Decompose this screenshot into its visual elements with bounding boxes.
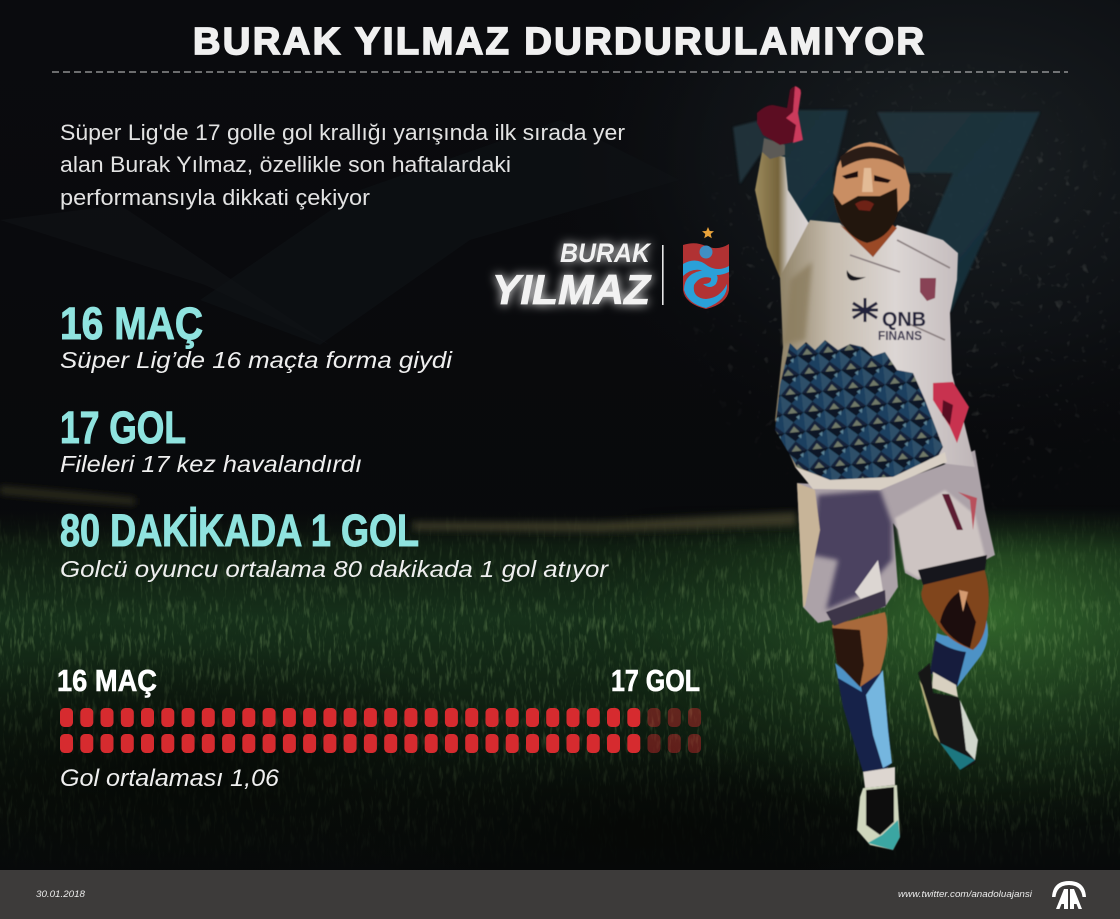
bar chart labels: 17 GOL [611, 663, 700, 698]
title: BURAK YILMAZ DURDURULAMIYOR [193, 21, 924, 63]
stat: 17 gol: Fileleri 17 kez havalandırdı [60, 451, 362, 477]
stat: 80 dakikada 1 gol: 80 DAKİKADA 1 GOL [60, 505, 419, 556]
stat: 17 gol [60, 402, 362, 477]
title divider [52, 71, 1068, 73]
footer bar [0, 870, 1120, 919]
left thigh [832, 612, 888, 687]
sponsor logo: FINANS [878, 328, 922, 343]
intro text [60, 120, 625, 210]
stat: 16 maç [60, 298, 453, 373]
sponsor logo: QNB [882, 309, 926, 331]
jersey hem [795, 452, 947, 490]
head [833, 142, 910, 243]
date: 30.01.2018 [36, 889, 86, 900]
name divider [662, 245, 664, 305]
shorts [797, 450, 995, 626]
intro text: alan Burak Yılmaz, özellikle son haftalardaki [60, 152, 511, 177]
player name: YILMAZ [492, 266, 651, 313]
nike swoosh [847, 270, 866, 281]
left sock [835, 663, 895, 788]
stat: 16 maç: 16 MAÇ [60, 298, 203, 349]
thigh band [918, 555, 987, 585]
jersey triangle mosaic [775, 340, 943, 480]
match and goal tally bars [60, 708, 701, 753]
twitter url: www.twitter.com/anadoluajansi [898, 889, 1033, 900]
background number 17 [733, 110, 1040, 312]
icon: AA logo [1052, 881, 1086, 909]
intro text: Süper Lig'de 17 golle gol krallığı yarışında ilk sırada yer [60, 120, 625, 145]
stat: 80 dakikada 1 gol: Golcü oyuncu ortalama 80 dakikada 1 gol atıyor [60, 556, 610, 582]
goal average caption: Gol ortalaması 1,06 [60, 765, 280, 792]
right thigh [921, 565, 989, 650]
player name: BURAK [560, 238, 652, 268]
left shoe [857, 785, 900, 850]
sponsor logo [852, 298, 926, 343]
raised hand glove [757, 86, 803, 145]
jersey [775, 220, 975, 488]
player name [492, 238, 652, 313]
bar chart labels [57, 663, 700, 698]
jersey crest [920, 278, 936, 301]
stat: 17 gol: 17 GOL [60, 402, 186, 453]
icon: Trabzonspor crest [683, 227, 729, 309]
player illustration [755, 86, 995, 850]
raised arm [755, 152, 810, 278]
stat: 16 maç: Süper Lig’de 16 maçta forma giydi [60, 347, 453, 373]
bar chart labels: 16 MAÇ [57, 663, 157, 698]
intro text: performansıyla dikkati çekiyor [60, 185, 370, 210]
right hand glove [933, 382, 969, 443]
grass field [0, 514, 1120, 856]
horizon light band [0, 486, 796, 532]
neck [840, 225, 897, 257]
right shoe [918, 663, 978, 770]
stat: 80 dakikada 1 gol [60, 505, 610, 582]
right leg sock [930, 618, 988, 697]
wrist band [762, 138, 785, 159]
